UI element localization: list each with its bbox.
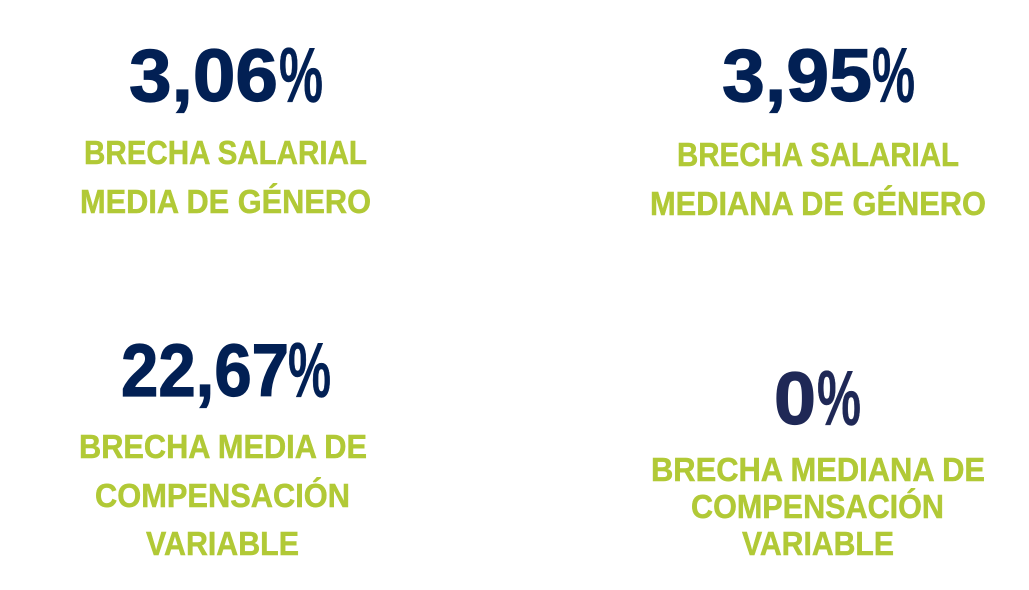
label: median gender pay gap <box>650 137 986 223</box>
value: 0% <box>774 354 861 442</box>
label: mean variable pay gap: VARIABLE <box>146 526 299 563</box>
label: median variable pay gap: VARIABLE <box>742 526 894 563</box>
label: median variable pay gap: BRECHA MEDIANA DE <box>651 452 985 489</box>
value: 0%: % <box>817 354 861 442</box>
label: mean variable pay gap: COMPENSACIÓN <box>95 477 350 515</box>
value: 22,67%: 22,67 <box>121 329 289 412</box>
panel: median gender pay gap <box>650 31 986 223</box>
label: median gender pay gap: BRECHA SALARIAL <box>677 137 959 174</box>
value: 3,95%: % <box>872 31 915 119</box>
panel: mean variable pay gap <box>79 326 367 563</box>
label: mean gender pay gap: MEDIA DE GÉNERO <box>80 183 371 221</box>
label: mean variable pay gap: BRECHA MEDIA DE <box>79 429 367 466</box>
panel: mean gender pay gap <box>80 31 371 221</box>
value: 22,67%: % <box>288 326 331 414</box>
panel: median variable pay gap <box>651 354 985 563</box>
label: median gender pay gap: MEDIANA DE GÉNERO <box>650 185 986 223</box>
value: 0%: 0 <box>774 357 816 440</box>
value: 3,95%: 3,95 <box>722 34 872 117</box>
label: mean variable pay gap <box>79 429 367 563</box>
value: 3,06%: 3,06 <box>129 34 278 117</box>
label: mean gender pay gap: BRECHA SALARIAL <box>84 135 367 172</box>
label: median variable pay gap: COMPENSACIÓN <box>691 488 944 526</box>
label: mean gender pay gap <box>80 135 371 221</box>
label: median variable pay gap <box>651 452 985 563</box>
value: 3,06%: % <box>279 31 323 119</box>
